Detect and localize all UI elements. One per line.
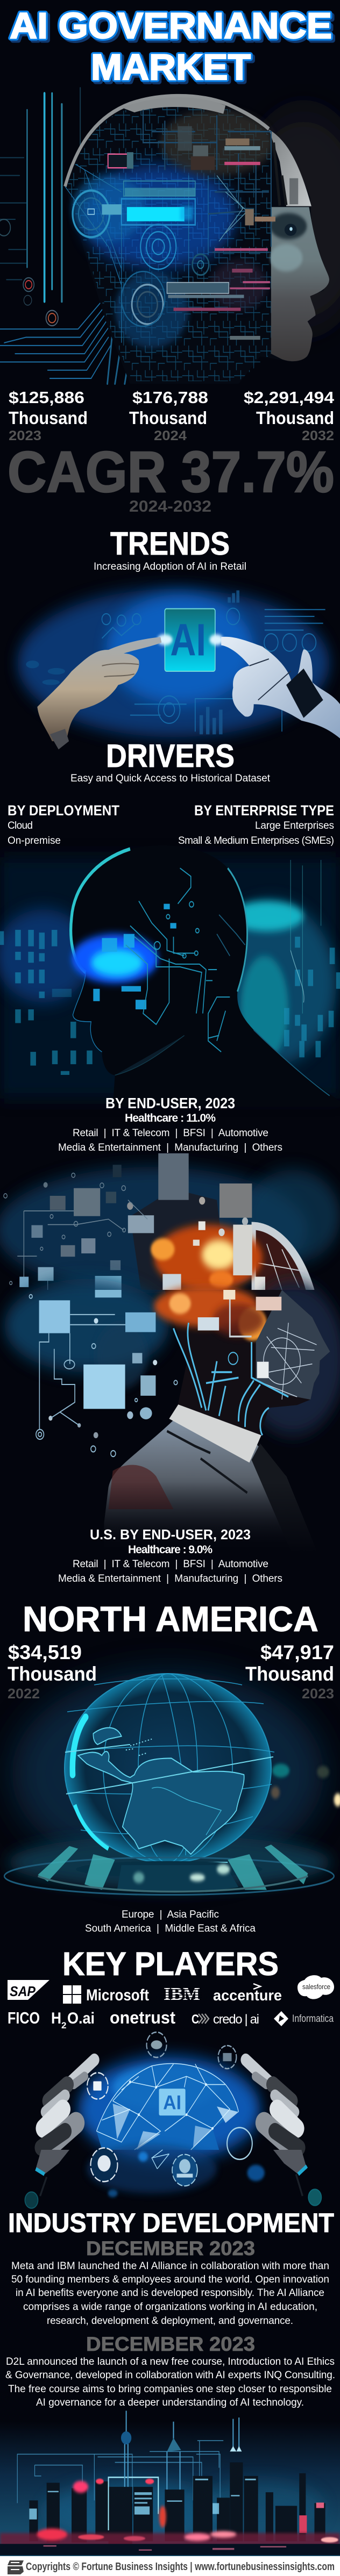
market values: 2023 (9, 428, 41, 443)
city lights (73, 2481, 88, 2493)
logo: Microsoft (63, 1985, 149, 2004)
logo: accenture: accenture (213, 1987, 282, 2004)
title: AI GOVERNANCE (10, 5, 332, 46)
development 1: comprises a wide range of organizations working in AI education, (23, 2301, 317, 2313)
logo: SAP: SAP (10, 1983, 36, 1999)
illustration: digital human upper part (0, 1153, 340, 1293)
AI tile (159, 2089, 186, 2115)
logo: H2O.ai: 2 (61, 2020, 66, 2030)
by deployment (8, 802, 119, 846)
u.s. by end-user: Healthcare : 9.0% (128, 1544, 212, 1556)
development 1: research, development & deployment, and governance. (47, 2315, 293, 2327)
brain network (96, 2064, 238, 2150)
development 2: The free course aims to bring companies one step closer to responsible (8, 2384, 332, 2395)
market values: $125,886 (9, 388, 84, 407)
logo: Informatica (274, 2011, 334, 2026)
trends heading (94, 526, 246, 572)
u.s. by end-user: U.S. BY END-USER, 2023 (90, 1526, 251, 1542)
by enterprise type: Small & Medium Enterprises (SMEs) (178, 835, 334, 846)
title: MARKET (91, 47, 251, 88)
logo: FICO: FICO (8, 2008, 40, 2027)
AI tile: AI (163, 2092, 181, 2114)
robot hand (221, 637, 340, 738)
development 2: AI governance for a deeper understanding of AI technology. (36, 2397, 304, 2408)
market values: $176,788 (132, 388, 208, 407)
development 1: Meta and IBM launched the AI Alliance in collaboration with more than (11, 2261, 329, 2272)
suit and collar (104, 1416, 317, 1551)
icon: Fortune Business Insights logo (8, 2560, 24, 2574)
development 1: DECEMBER 2023 (86, 2237, 255, 2259)
north america heading: NORTH AMERICA (23, 1599, 318, 1639)
skyline buildings (29, 2463, 325, 2544)
face (271, 207, 329, 361)
human hand (37, 637, 161, 741)
key players heading: KEY PLAYERS (62, 1946, 279, 1982)
development 2: DECEMBER 2023 (86, 2333, 255, 2355)
by deployment: Cloud (8, 820, 33, 831)
other regions (85, 1909, 256, 1934)
trends heading: Increasing Adoption of AI in Retail (94, 561, 246, 572)
north america values: 2022 (8, 1685, 40, 1702)
profile (165, 1290, 330, 1435)
illustration: digital human lower part (4, 1279, 340, 1553)
title: AI GOVERNANCE (10, 5, 332, 46)
development 2: D2L announced the launch of a new free course, Introduction to AI Ethics (6, 2356, 335, 2367)
u.s. by end-user (58, 1526, 282, 1584)
north america values: $34,519 (8, 1641, 82, 1663)
by end-user (58, 1095, 282, 1153)
development 2: & Governance, developed in collaboration with AI experts INQ Consulting. (5, 2370, 335, 2381)
logo: salesforce: salesforce (302, 1983, 330, 1991)
by deployment: On-premise (8, 835, 61, 846)
holographic base (4, 1857, 334, 1895)
by end-user: Healthcare : 11.0% (125, 1112, 216, 1124)
globe highlights (73, 1717, 86, 1775)
logo: onetrust: onetrust (110, 2008, 175, 2027)
by enterprise type (178, 802, 334, 846)
by end-user: Retail | IT & Telecom | BFSI | Automotive (73, 1128, 268, 1139)
AI tile: AI (170, 615, 206, 665)
north america values: $47,917 (260, 1641, 334, 1663)
logo: salesforce (298, 1975, 334, 1999)
illustration: hologram globe (4, 1671, 340, 1895)
illustration: AI brain with robot hands (25, 2032, 321, 2208)
drivers heading (70, 738, 271, 784)
logo: credo ai: credo | ai (213, 2012, 259, 2027)
CAGR: 2024-2032 (129, 498, 211, 515)
u.s. by end-user: Retail | IT & Telecom | BFSI | Automotive (73, 1559, 268, 1570)
logo: credo ai (192, 2012, 259, 2027)
market values (9, 388, 335, 443)
by end-user: BY END-USER, 2023 (105, 1095, 235, 1111)
north america values: Thousand (8, 1663, 97, 1685)
illustration: circuit head silhouette (0, 845, 340, 1107)
trends heading: TRENDS (110, 526, 230, 562)
by end-user: Media & Entertainment | Manufacturing | Others (58, 1142, 282, 1153)
silhouette (71, 845, 340, 1107)
by enterprise type: Large Enterprises (255, 820, 334, 831)
development 1 (11, 2237, 329, 2327)
AI tile (165, 609, 215, 671)
continents (78, 1728, 244, 1854)
market values: Thousand (9, 408, 88, 428)
logo: SAP (8, 1980, 49, 2000)
north america values: 2023 (302, 1685, 334, 1702)
other regions: South America | Middle East & Africa (85, 1923, 256, 1934)
development 1: in AI benefits everyone and is developed responsibly. The AI Alliance (16, 2287, 324, 2299)
trends hands illustration (17, 589, 340, 749)
footer (0, 2556, 340, 2576)
development 1: 50 founding members & employees around the world. Open innovation (11, 2274, 329, 2285)
logo: H2O.ai (51, 2010, 95, 2030)
by deployment: BY DEPLOYMENT (8, 802, 119, 819)
glowing cyan bar (127, 207, 185, 221)
robot hands (41, 2060, 299, 2148)
north america values: Thousand (245, 1663, 334, 1685)
logo: IBM: IBM (164, 1984, 200, 2004)
market values: Thousand (129, 408, 207, 428)
glowing blue mind (72, 934, 158, 984)
logo: Microsoft: Microsoft (86, 1986, 149, 2004)
north america values (8, 1641, 334, 1702)
market values: 2032 (302, 428, 334, 443)
title (10, 5, 332, 88)
logo: H2O.ai: H (51, 2010, 61, 2027)
market values: $2,291,494 (244, 388, 335, 407)
logos (8, 1975, 334, 2030)
hero illustration: AI head (0, 88, 340, 384)
market values: Thousand (256, 408, 334, 428)
market values: 2024 (154, 428, 187, 443)
logo: H2O.ai: O.ai (67, 2010, 95, 2027)
skull silhouette (65, 96, 329, 384)
development 2 (5, 2333, 335, 2408)
drivers heading: DRIVERS (106, 738, 235, 774)
floating icons (87, 2032, 252, 2159)
drivers heading: Easy and Quick Access to Historical Dataset (70, 773, 271, 784)
title: MARKET (91, 47, 251, 88)
logo: credo ai: C (192, 2012, 199, 2027)
other regions: Europe | Asia Pacific (122, 1909, 219, 1920)
illustration: neon city skyline (0, 2410, 340, 2556)
u.s. by end-user: Media & Entertainment | Manufacturing | Others (58, 1573, 282, 1584)
